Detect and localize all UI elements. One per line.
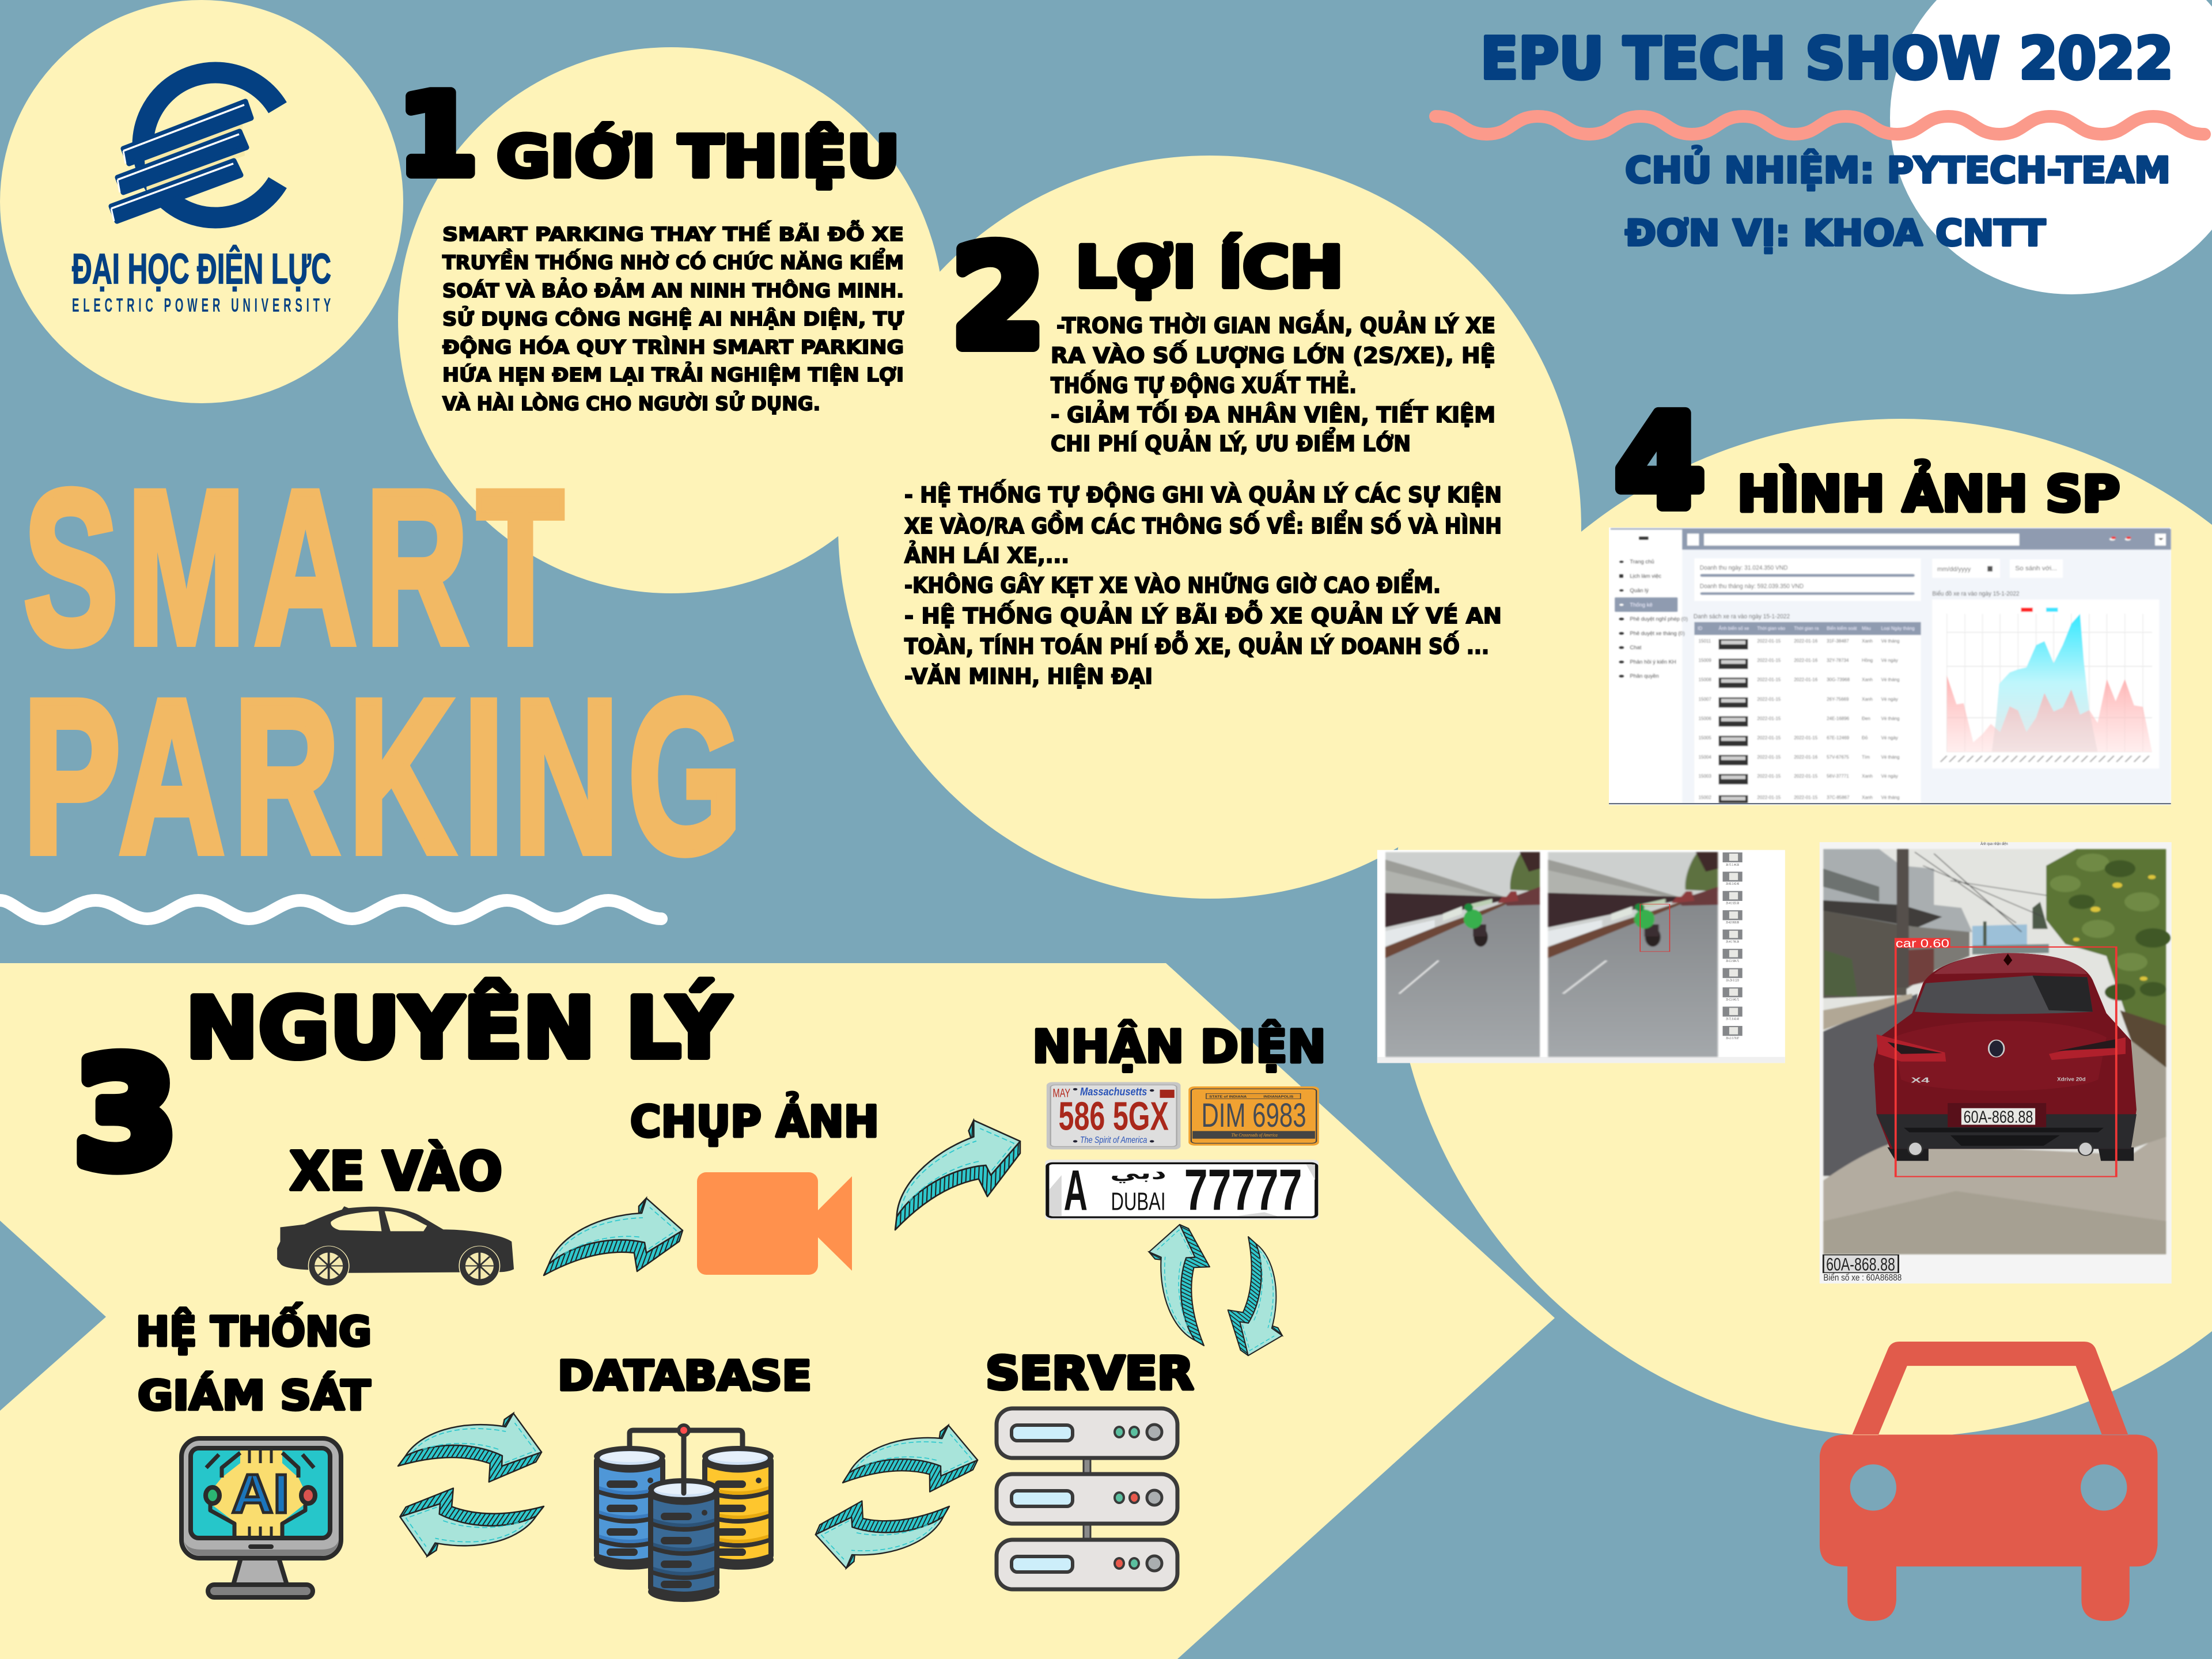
dashboard screenshot: Xanh (1862, 696, 1873, 702)
dashboard screenshot: 2022-01-15 (1794, 774, 1818, 779)
dashboard screenshot: 26Y-75669 (1827, 696, 1849, 702)
plate: Indiana: INDIANAPOLIS (1263, 1094, 1294, 1099)
video detection screenshot: 29-C1 640.71 (1726, 998, 1739, 1001)
dashboard screenshot: ID (1698, 626, 1702, 631)
arrow: database to server (843, 1411, 982, 1502)
dashboard screenshot: Quản lý (1630, 588, 1649, 593)
dashboard screenshot: 15003 (1699, 774, 1711, 779)
dashboard screenshot: 2022-01-16 (1794, 658, 1818, 663)
dashboard screenshot: Xanh (1862, 774, 1873, 779)
photo: car: Xdrive 20d (2057, 1077, 2086, 1082)
text: benefits lower: ẢNH LÁI XE,... (904, 540, 1069, 568)
dashboard screenshot: Màu (1862, 626, 1871, 631)
decorative white wave (0, 900, 661, 919)
text: introduction: SỬ DỤNG CÔNG NGHỆ AI NHẬN DIỆN, TỰ (442, 305, 904, 330)
text: benefits lower: - HỆ THỐNG TỰ ĐỘNG GHI VÀ QUẢN LÝ CÁC SỰ KIỆN (904, 479, 1502, 507)
car detection screenshot (1820, 841, 2172, 1283)
video detection screenshot: 29-B1 3.42.46 (1726, 882, 1739, 886)
text: introduction (442, 219, 904, 415)
arrow: server up to recognition (1139, 1221, 1217, 1346)
dashboard screenshot: 2022-01-16 (1794, 639, 1818, 644)
dashboard screenshot: Vé tháng (1881, 677, 1900, 682)
video detection screenshot (1377, 850, 1785, 1063)
panel: blob behind product images (1392, 419, 2212, 1437)
dashboard screenshot: Phê duyệt nghỉ phép (0) (1630, 616, 1688, 622)
label: Hệ thống giám sát: GIÁM SÁT (138, 1372, 370, 1419)
license plates (1046, 1082, 1319, 1222)
dashboard screenshot: Lịch làm việc (1630, 573, 1661, 579)
dashboard screenshot (1609, 528, 2171, 805)
arrow: recognition down to server (1213, 1237, 1308, 1363)
text: benefits upper (1051, 310, 1495, 456)
text: benefits lower: XE VÀO/RA GỒM CÁC THÔNG SỐ VỀ: BIỂN SỐ VÀ HÌNH (904, 510, 1502, 539)
text: 77777 (1184, 1157, 1302, 1222)
dashboard screenshot: Doanh thu ngày: 31.024.350 VND (1700, 564, 1787, 571)
dashboard screenshot: Xanh (1862, 639, 1873, 644)
dashboard screenshot: Vé tháng (1881, 795, 1900, 800)
photo: car: X4 (1911, 1076, 1930, 1084)
dashboard screenshot: 15006 (1699, 716, 1711, 721)
dashboard screenshot: 15008 (1699, 677, 1711, 682)
text: introduction: SMART PARKING THAY THẾ BÃI ĐỖ XE (442, 219, 904, 245)
plate: Indiana: The Crossroads of America (1231, 1132, 1278, 1138)
text: benefits upper: - GIẢM TỐI ĐA NHÂN VIÊN, TIẾT KIỆM (1051, 399, 1495, 427)
dashboard screenshot: 2022-01-15 (1757, 774, 1781, 779)
dashboard screenshot: Đen (1862, 716, 1870, 721)
dashboard screenshot: Thống kê (1630, 602, 1653, 608)
dashboard screenshot: So sánh với... (2015, 565, 2057, 571)
video detection screenshot: 29-H1 925.58 (1726, 901, 1739, 905)
video detection screenshot: 29-E2 868.89 (1726, 921, 1739, 925)
plate: Massachusetts: The Spirit of America (1080, 1135, 1147, 1145)
text: benefits lower: TOÀN, TÍNH TOÁN PHÍ ĐỖ XE, QUẢN LÝ DOANH SỐ ... (904, 631, 1489, 659)
dashboard screenshot: 37C-85867 (1827, 795, 1850, 800)
title: Smart Parking: SMART (24, 445, 573, 690)
text: introduction: ĐỘNG HÓA QUY TRÌNH SMART PARKING (442, 335, 904, 358)
dashboard screenshot: Biểu đồ xe ra vào ngày 15-1-2022 (1932, 590, 2020, 597)
panel: principle arrow shape (0, 963, 1555, 1659)
dashboard screenshot: Danh sách xe ra vào ngày 15-1-2022 (1694, 613, 1790, 620)
plate: Indiana (1188, 1086, 1319, 1146)
text: unit: ĐƠN VỊ: KHOA CNTT (1625, 212, 2046, 254)
dashboard screenshot: 15009 (1699, 658, 1711, 663)
dashboard screenshot: Ảnh biển số xe (1719, 626, 1749, 631)
heading: 3: 3 (74, 1028, 177, 1202)
text: benefits lower: - HỆ THỐNG QUẢN LÝ BÃI ĐỖ XE QUẢN LÝ VÉ AN (904, 600, 1502, 628)
dashboard screenshot: Xanh (1862, 795, 1873, 800)
heading: 2: 2 (952, 217, 1045, 378)
text: benefits lower: -KHÔNG GÂY KẸT XE VÀO NHỮNG GIỜ CAO ĐIỂM. (904, 569, 1441, 598)
detection box (1895, 937, 2116, 1176)
plate: Massachusetts: Massachusetts (1080, 1085, 1147, 1098)
dashboard screenshot: Tím (1862, 755, 1870, 760)
plate: Dubai: DUBAI (1111, 1187, 1165, 1215)
detection box: car 0.60 (1896, 937, 1949, 950)
plate crop (1823, 1254, 1899, 1274)
title: Smart Parking (23, 445, 751, 899)
plate: Dubai (1046, 1157, 1319, 1222)
text: introduction: HỨA HẸN ĐEM LẠI TRẢI NGHIỆM TIỆN LỢI (442, 361, 904, 386)
text: benefits upper: CHI PHÍ QUẢN LÝ, ƯU ĐIỂM LỚN (1051, 427, 1411, 456)
photo: car: 60A-868.88 (1964, 1108, 2033, 1127)
license plates: 586 5GX (1058, 1093, 1169, 1138)
dashboard screenshot: Đỏ (1862, 735, 1868, 740)
video detection screenshot: 33-Z6 8.120 (1726, 978, 1739, 982)
video detection screenshot: 29-H1 796.36 (1726, 940, 1739, 944)
decorative pink wave (1435, 116, 2205, 134)
dashboard screenshot: 15002 (1699, 795, 1711, 800)
text: benefits lower (904, 479, 1502, 689)
text: team: CHỦ NHIỆM: PYTECH-TEAM (1625, 146, 2171, 191)
title: Smart Parking: PARKING (23, 654, 751, 899)
dashboard screenshot: Vé ngày (1881, 774, 1898, 779)
dashboard screenshot: Biển kiểm soát (1827, 626, 1857, 631)
dashboard screenshot: Thời gian ra (1794, 626, 1819, 631)
arrow: database to monitor (392, 1474, 544, 1581)
label: AI on monitor: AI (232, 1463, 289, 1525)
text: benefits upper: THỐNG TỰ ĐỘNG XUẤT THẺ. (1051, 370, 1357, 398)
car detection screenshot: Biển số xe : 60A86888 (1823, 1272, 1902, 1282)
dashboard screenshot: 15005 (1699, 735, 1711, 740)
icon: database (594, 1423, 774, 1602)
dashboard screenshot: Chat (1630, 645, 1642, 650)
dashboard screenshot: 32Y-78734 (1827, 658, 1849, 663)
icon: red car (1820, 1342, 2157, 1621)
label: Hệ thống giám sát (136, 1303, 372, 1419)
dashboard screenshot: 2022-01-15 (1757, 716, 1781, 721)
label: Nhận diện: NHẬN DIỆN (1032, 1020, 1326, 1073)
photo: street (1823, 849, 2171, 1254)
arrow: camera to recognition (871, 1109, 1034, 1230)
text: introduction: VÀ HÀI LÒNG CHO NGƯỜI SỬ DỤNG. (442, 390, 820, 415)
dashboard screenshot: 2022-01-15 (1757, 755, 1781, 760)
dashboard screenshot: Phân quyền (1630, 673, 1659, 679)
heading: Hình ảnh SP: HÌNH ẢNH SP (1737, 460, 2120, 523)
heading: 1: 1 (398, 70, 478, 200)
dashboard screenshot: 15007 (1699, 696, 1711, 702)
icon: camera (697, 1172, 852, 1275)
text: benefits lower: -VĂN MINH, HIỆN ĐẠI (904, 664, 1153, 689)
dashboard screenshot: 2022-01-15 (1794, 735, 1818, 740)
dashboard screenshot: 15004 (1699, 755, 1711, 760)
car detection screenshot: Ảnh qua nhận diện (1980, 841, 2008, 846)
dashboard screenshot: Vé ngày (1881, 735, 1898, 740)
dashboard screenshot: Vé tháng (1881, 755, 1900, 760)
title: EPU Tech Show 2022: EPU TECH SHOW 2022 (1480, 25, 2173, 92)
panel: blob behind introduction (398, 47, 944, 593)
logo subtitle: ELECTRIC POWER UNIVERSITY (72, 294, 335, 316)
plate: Massachusetts (1047, 1082, 1180, 1149)
dashboard screenshot: Thời gian vào (1757, 626, 1786, 631)
label: Server: SERVER (986, 1348, 1194, 1400)
text: benefits upper: -TRONG THỜI GIAN NGẮN, QUẢN LÝ XE (1056, 310, 1495, 338)
dashboard screenshot: Phản hồi ý kiến KH (1630, 659, 1676, 665)
video detection screenshot: 36-T1 1.44.36 (1726, 862, 1739, 866)
dashboard screenshot: 2022-01-15 (1757, 696, 1781, 702)
dashboard screenshot: 24E-16896 (1827, 716, 1850, 721)
dashboard screenshot: mm/dd/yyyy (1937, 565, 1971, 573)
panel: blob behind benefits (838, 156, 1581, 899)
text: benefits upper: RA VÀO SỐ LƯỢNG LỚN (2S/XE), HỆ (1051, 340, 1495, 368)
label: Chụp ảnh: CHỤP ẢNH (630, 1092, 879, 1147)
dashboard screenshot: 2022-01-16 (1794, 677, 1818, 682)
plate: Dubai: دبي (1110, 1162, 1166, 1183)
dashboard screenshot: 2022-01-15 (1757, 658, 1781, 663)
dashboard screenshot: 31F-38487 (1827, 639, 1849, 644)
photo: car (1874, 953, 2137, 1161)
dashboard screenshot: Vé ngày (1881, 696, 1898, 702)
dashboard screenshot: 2022-01-15 (1757, 795, 1781, 800)
heading: Giới thiệu: GIỚI THIỆU (497, 123, 900, 190)
dashboard screenshot: Loại Ngày tháng (1881, 626, 1915, 631)
dashboard screenshot: Vé tháng (1881, 639, 1900, 644)
label: Xe vào: XE VÀO (290, 1140, 502, 1202)
dashboard screenshot: Trang chủ (1630, 559, 1654, 565)
heading: 4: 4 (1615, 388, 1705, 536)
dashboard screenshot: 2022-01-15 (1757, 735, 1781, 740)
text: DIM 6983 (1201, 1097, 1306, 1134)
plate: Indiana: STATE of INDIANA (1209, 1094, 1247, 1099)
white circle top right (1890, 0, 2212, 294)
logo mark (111, 73, 278, 221)
arrow: server to database (812, 1493, 949, 1578)
heading: Nguyên lý: NGUYÊN LÝ (185, 979, 732, 1077)
text: introduction: TRUYỀN THỐNG NHỜ CÓ CHỨC NĂNG KIỂM (442, 248, 904, 274)
dashboard screenshot: 56V-37771 (1827, 774, 1849, 779)
dashboard screenshot: Hồng (1862, 658, 1873, 663)
car detection screenshot: 60A-868.88 (1826, 1254, 1895, 1274)
dashboard screenshot: 57V-67675 (1827, 755, 1849, 760)
dashboard screenshot: Xanh (1862, 677, 1873, 682)
photo: rider frame (1385, 852, 1540, 1057)
dashboard screenshot: Vé tháng (1881, 716, 1900, 721)
panel: logo circle (0, 0, 403, 403)
logo name: ĐẠI HỌC ĐIỆN LỰC (72, 245, 331, 293)
dashboard screenshot: Vé ngày (1881, 658, 1898, 663)
video detection screenshot: 29-T1 8.43.40 (1726, 1017, 1739, 1021)
arrow: car to camera (544, 1198, 683, 1275)
dashboard screenshot: Doanh thu tháng này: 592.039.350 VND (1700, 582, 1804, 590)
icon: car silhouette (277, 1206, 514, 1286)
arrow: monitor to database (398, 1392, 548, 1495)
dashboard screenshot: 2022-01-15 (1794, 795, 1818, 800)
icon: server (997, 1408, 1177, 1589)
video detection screenshot: 29-C1 584.71 (1726, 959, 1739, 963)
plate: Dubai: A (1064, 1158, 1088, 1222)
label: Database: DATABASE (558, 1352, 812, 1400)
dashboard screenshot: Phê duyệt xe tháng (0) (1630, 630, 1685, 636)
dashboard screenshot: 2022-01-15 (1757, 677, 1781, 682)
text: introduction: SOÁT VÀ BẢO ĐẢM AN NINH THÔNG MINH. (442, 277, 904, 302)
heading: Lợi ích: LỢI ÍCH (1075, 233, 1343, 301)
dashboard screenshot: 2022-01-15 (1757, 639, 1781, 644)
dashboard screenshot: 2022-01-16 (1794, 755, 1818, 760)
dashboard screenshot: 30G-73968 (1827, 677, 1850, 682)
dashboard screenshot: 67E-12469 (1827, 735, 1850, 740)
photo: rider frame detected (1548, 852, 1718, 1057)
dashboard screenshot: 15011 (1699, 639, 1711, 644)
video detection screenshot: 29-L1 0.79.87 (1726, 1036, 1739, 1040)
label: Hệ thống giám sát: HỆ THỐNG (136, 1303, 372, 1355)
icon: AI monitor (181, 1438, 341, 1597)
plate: Massachusetts: MAY (1053, 1086, 1070, 1100)
